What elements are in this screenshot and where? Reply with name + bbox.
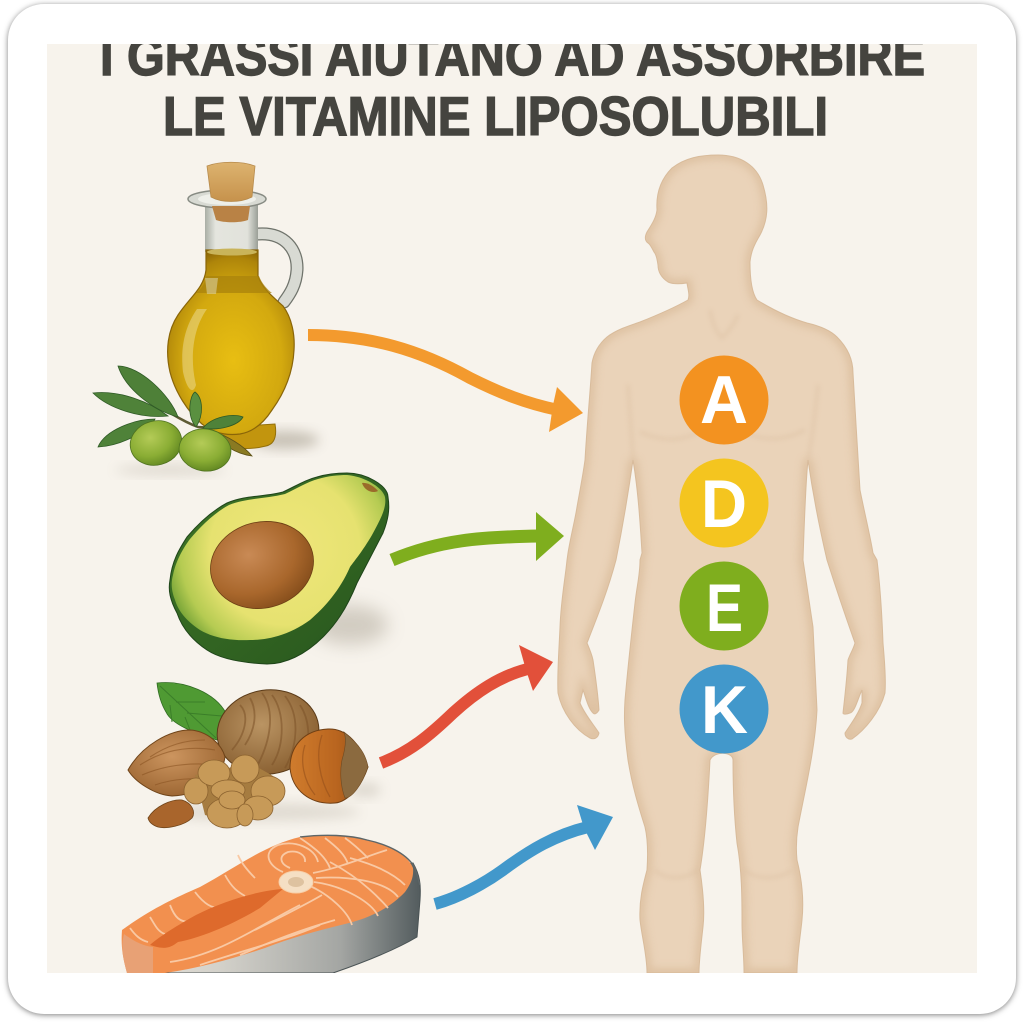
title: LE VITAMINE LIPOSOLUBILI [163, 85, 828, 147]
green leaf [157, 683, 226, 740]
human body silhouette [558, 155, 885, 973]
arrow: orange, olive oil to body [308, 335, 583, 432]
vitamin E badge: E [706, 570, 743, 646]
almond [128, 730, 225, 796]
avocado seed [210, 521, 314, 609]
arrow: green, avocado to body [392, 512, 564, 561]
salmon skin [153, 863, 420, 973]
olive branch [93, 366, 252, 474]
avocado skin [169, 473, 389, 664]
oil surface band [196, 276, 272, 293]
arrow: blue, salmon to body [435, 805, 613, 904]
oil body [168, 250, 294, 435]
small almond [148, 800, 194, 828]
cork stopper [207, 162, 255, 202]
jug neck [205, 200, 258, 252]
avocado stem scar [362, 483, 378, 492]
salmon belly cut [150, 889, 283, 948]
vitamin K badge: K [701, 672, 748, 748]
vitamin A badge: A [700, 362, 748, 438]
olive oil jug with olives [93, 162, 319, 475]
avocado half [169, 473, 389, 664]
walnut kernel [184, 755, 285, 828]
glass highlight [182, 309, 207, 390]
mixed nuts [128, 683, 381, 828]
body edge and muscle shading [558, 155, 885, 973]
vitamin A badge [680, 356, 768, 444]
jug handle [258, 234, 297, 302]
vitamin D badge [680, 458, 768, 548]
large walnut shell [216, 689, 320, 774]
salmon fat lines [130, 838, 405, 965]
jug base [216, 424, 276, 448]
title [102, 44, 924, 136]
jug lip [188, 190, 266, 208]
avocado flesh [172, 475, 385, 640]
salmon backbone [279, 871, 313, 893]
vitamin D badge: D [701, 466, 747, 542]
salmon flesh [122, 835, 413, 973]
arrow: red, nuts to body [381, 645, 553, 763]
salmon steak [122, 835, 420, 973]
vitamin E badge [680, 562, 768, 650]
vitamin K badge [680, 664, 768, 754]
hazelnut [290, 729, 368, 803]
title: I GRASSI AIUTANO AD ASSORBIRE [100, 25, 925, 87]
